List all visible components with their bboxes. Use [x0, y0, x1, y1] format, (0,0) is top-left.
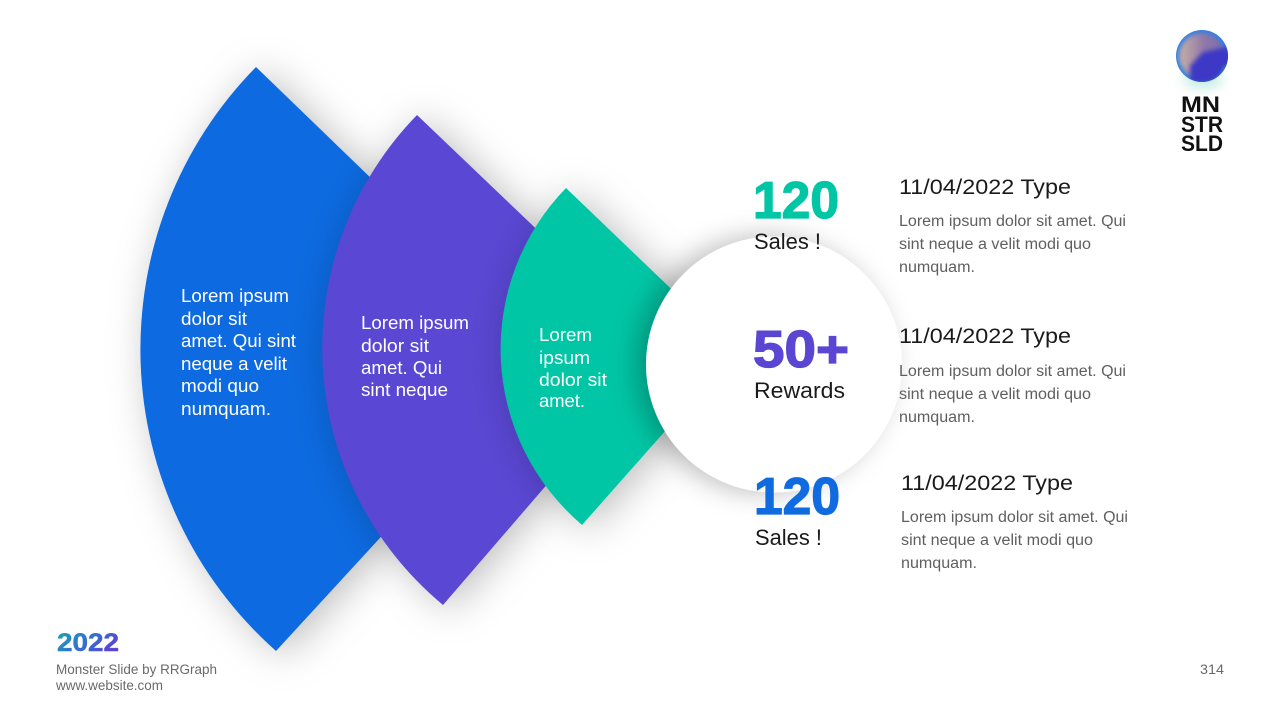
logo	[1176, 30, 1228, 151]
stat: 120 sales: Sales !	[754, 229, 821, 254]
panel: blue wedge	[140, 67, 551, 651]
stat: 120 sales lower: 120	[754, 468, 840, 526]
green wedge text: amet.	[539, 390, 585, 411]
green wedge text	[539, 324, 607, 411]
text block: second entry	[899, 324, 1126, 426]
stat: 50+ rewards	[753, 321, 849, 403]
text block: third entry: Lorem ipsum dolor sit amet. Qui	[901, 509, 1128, 526]
logo: SLD	[1181, 131, 1223, 156]
stat: 120 sales: 120	[753, 172, 839, 230]
stat: 120 sales lower: Sales !	[755, 525, 822, 550]
blue wedge text: Lorem ipsum	[181, 285, 289, 306]
text block: third entry: sint neque a velit modi quo	[901, 532, 1093, 549]
purple wedge text: amet. Qui	[361, 357, 442, 378]
text block: first entry: 11/04/2022 Type	[899, 175, 1071, 199]
text block: second entry: sint neque a velit modi quo	[899, 386, 1091, 403]
purple wedge text: Lorem ipsum	[361, 312, 469, 333]
text block: third entry: numquam.	[901, 555, 977, 572]
text block: third entry: 11/04/2022 Type	[901, 471, 1073, 495]
stat: 50+ rewards: Rewards	[754, 378, 845, 403]
text block: first entry	[899, 175, 1126, 276]
green wedge text: Lorem	[539, 324, 592, 345]
purple wedge text: sint neque	[361, 379, 448, 400]
page number: 314	[1200, 662, 1225, 677]
center circle	[646, 236, 902, 492]
stat: 50+ rewards: 50+	[753, 321, 849, 379]
blue wedge text: modi quo	[181, 375, 259, 396]
purple wedge text	[361, 312, 469, 400]
blue wedge text	[181, 285, 296, 419]
footer: year and credits: www.website.com	[55, 678, 163, 693]
blue wedge text: neque a velit	[181, 353, 287, 374]
green wedge text: dolor sit	[539, 369, 607, 390]
blue wedge text: numquam.	[181, 398, 271, 419]
blue wedge text: dolor sit	[181, 308, 247, 329]
logo: MN	[1181, 92, 1220, 117]
panel: purple wedge	[322, 115, 663, 605]
text block: second entry: 11/04/2022 Type	[899, 324, 1071, 348]
panel: green wedge	[501, 188, 736, 525]
green wedge text: ipsum	[539, 347, 590, 368]
logo: STR	[1181, 112, 1223, 137]
text block: first entry: sint neque a velit modi quo	[899, 236, 1091, 253]
text block: first entry: Lorem ipsum dolor sit amet. Qui	[899, 213, 1126, 230]
blue wedge text: amet. Qui sint	[181, 330, 296, 351]
text block: second entry: Lorem ipsum dolor sit amet. Qui	[899, 363, 1126, 380]
footer: year and credits: Monster Slide by RRGraph	[56, 662, 217, 677]
purple wedge text: dolor sit	[361, 335, 429, 356]
text block: third entry	[901, 471, 1128, 572]
footer: year and credits: 2022	[57, 629, 119, 657]
text block: first entry: numquam.	[899, 259, 975, 276]
text block: second entry: numquam.	[899, 409, 975, 426]
footer: year and credits	[55, 629, 217, 693]
